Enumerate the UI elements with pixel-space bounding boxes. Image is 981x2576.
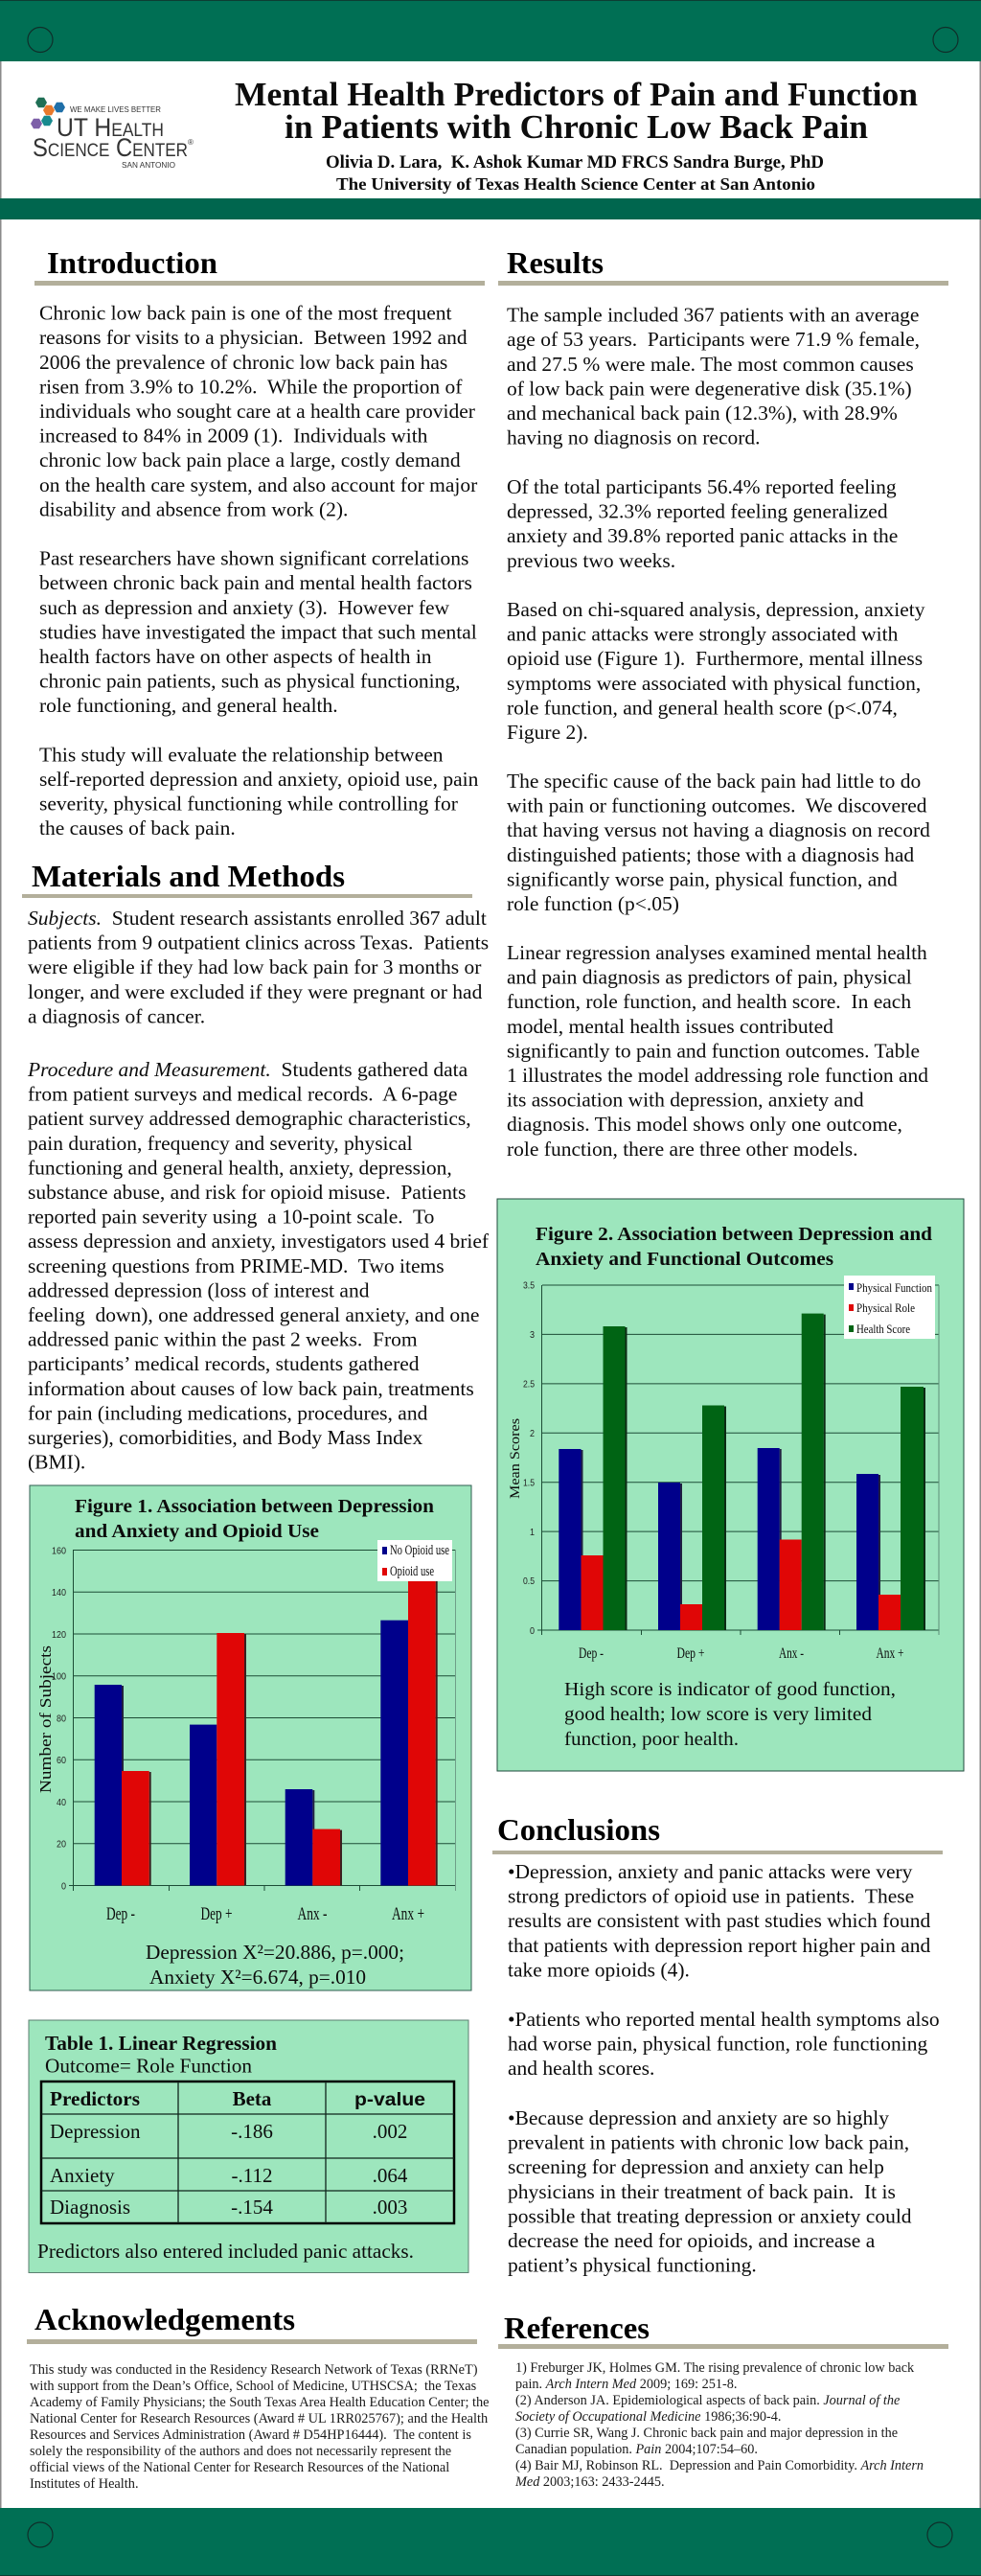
text block: materials and methods: feeling down), one addressed general anxiety, and one (28, 1303, 479, 1326)
text block: introduction: self-reported depression and anxiety, opioid use, pain (39, 768, 479, 791)
text block: results: Figure 2). (507, 721, 588, 744)
text block: references: Arch Intern Med 2009; 169: 251-8. (546, 2377, 737, 2392)
text block: results: significantly worse pain, physical function, and (507, 867, 898, 890)
logo: UT Health Science Center: Science Center (33, 133, 188, 162)
text block: introduction: 2006 the prevalence of chronic low back pain has (39, 351, 447, 374)
y axis ticks: 3 (530, 1329, 535, 1341)
authors and institution (326, 153, 824, 194)
figure 2 title: Figure 2. Association between Depression and (536, 1224, 932, 1245)
regression table: -.112 (232, 2164, 272, 2187)
regression table (41, 2082, 454, 2223)
text block: references: 2003;163: 2433-2445. (539, 2474, 665, 2490)
text block: results: Of the total participants 56.4% reported feeling (507, 475, 897, 498)
text block: results: Based on chi-squared analysis, depression, anxiety (507, 598, 925, 621)
bar chart: functional outcomes (508, 1276, 939, 1662)
text block: conclusions: that patients with depression report higher pain and (508, 1934, 930, 1957)
text block: conclusions: prevalent in patients with chronic low back pain, (508, 2131, 909, 2154)
text block: references: Society of Occupational Medicine (515, 2409, 701, 2425)
text block: materials and methods: reported pain severity using a 10-point scale. To (28, 1206, 434, 1229)
text block: introduction: reasons for visits to a physician. Between 1992 and (39, 326, 468, 349)
text block: materials and methods: addressed panic within the past 2 weeks. From (28, 1328, 418, 1351)
x axis labels: Anx - (779, 1645, 804, 1662)
x axis labels: Anx + (392, 1904, 424, 1924)
y axis ticks (52, 1545, 66, 1892)
y axis ticks: 2 (530, 1428, 535, 1439)
regression table: Depression (50, 2120, 141, 2143)
y axis ticks: 140 (52, 1587, 66, 1598)
y axis ticks: 80 (57, 1714, 66, 1725)
panel: table 1 (29, 2020, 468, 2273)
chi-squared note: Depression X²=20.886, p=.000; (146, 1941, 404, 1964)
text block: acknowledgements: solely the responsibility of the authors and does not necessarily represent the (30, 2444, 451, 2459)
text block: results: symptoms were associated with physical function, (507, 672, 921, 695)
x axis labels: Dep - (579, 1645, 604, 1662)
text block: materials and methods: surgeries), comorbidities, and Body Mass Index (28, 1426, 422, 1449)
heading: Acknowledgements (27, 2302, 477, 2344)
legend (844, 1276, 935, 1339)
text block: conclusions: patient’s physical functioning. (508, 2254, 757, 2277)
legend: Opioid use (390, 1564, 434, 1579)
x axis labels (579, 1645, 904, 1662)
text block: introduction: health factors have on other aspects of health in (39, 645, 432, 668)
text block: results: model, mental health issues contributed (507, 1015, 833, 1038)
text block: acknowledgements: This study was conducted in the Residency Research Network of Texas (RRNeT) (30, 2362, 478, 2378)
text block: introduction: severity, physical functioning while controlling for (39, 793, 458, 816)
figure 1 title: Figure 1. Association between Depression (75, 1496, 434, 1517)
bars (95, 1572, 438, 1886)
y axis ticks (523, 1280, 535, 1637)
regression table: .003 (373, 2196, 407, 2219)
text block: materials and methods: patient survey addressed demographic characteristics, (28, 1107, 471, 1130)
table title: Table 1. Linear Regression (45, 2032, 277, 2055)
text block: introduction: increased to 84% in 2009 (1). Individuals with (39, 425, 428, 448)
figure 1 title (75, 1496, 434, 1542)
text block: results: and pain diagnosis as predictors of pain, physical (507, 966, 912, 989)
regression table: p-value (354, 2090, 425, 2110)
x axis labels: Dep - (106, 1904, 135, 1924)
text block: materials and methods: substance abuse, and risk for opioid misuse. Patients (28, 1181, 466, 1204)
text block: acknowledgements: with support from the Dean’s Office, School of Medicine, UTHSCSA; the Texas (30, 2379, 477, 2394)
regression table: Anxiety (50, 2164, 115, 2187)
text block: introduction: such as depression and anxiety (3). However few (39, 596, 450, 619)
text block: results: and 27.5 % were male. The most common causes (507, 353, 914, 376)
text block: conclusions: decrease the need for opioids, and increase a (508, 2229, 876, 2252)
y axis ticks: 40 (57, 1797, 66, 1808)
title (235, 76, 918, 146)
text block: conclusions: screening for depression and anxiety can help (508, 2155, 884, 2178)
figure 2 note: High score is indicator of good function, (564, 1679, 896, 1700)
figure 2 title: Anxiety and Functional Outcomes (536, 1249, 833, 1270)
text block: results: with pain or functioning outcomes. We discovered (507, 794, 927, 817)
figure 2 note: good health; low score is very limited (564, 1704, 872, 1725)
text block: acknowledgements: Resources and Services Administration (Award # D54HP16444). The content is (30, 2427, 471, 2443)
text block: materials and methods: (BMI). (28, 1451, 85, 1474)
text block: introduction: role functioning, and general health. (39, 694, 338, 717)
text block: references: Med (514, 2474, 540, 2490)
text block: results: of low back pain were degenerative disk (35.1%) (507, 377, 912, 400)
text block: references: pain. (515, 2377, 546, 2392)
text block: results: Linear regression analyses examined mental health (507, 941, 927, 964)
text block: materials and methods: Students gathered data (271, 1058, 468, 1081)
logo: UT Health Science Center: UT Health (57, 113, 164, 142)
legend: Physical Function (856, 1280, 932, 1295)
heading: Conclusions (492, 1812, 943, 1854)
text block: acknowledgements: official views of the National Center for Research Resources of the National (30, 2460, 449, 2475)
regression table: Diagnosis (50, 2196, 130, 2219)
text block: references: Canadian population. (515, 2442, 635, 2457)
text block: materials and methods: participants’ medical records, students gathered (28, 1352, 420, 1375)
text block: results: role function, there are three other models. (507, 1138, 858, 1161)
table title: Outcome= Role Function (45, 2055, 252, 2078)
heading: Introduction: Introduction (47, 245, 217, 280)
text block: materials and methods: addressed depression (loss of interest and (28, 1278, 370, 1301)
text block: references: (2) Anderson JA. Epidemiological aspects of back pain. (515, 2393, 823, 2408)
text block: results: function, role function, and health score. In each (507, 990, 911, 1013)
text block: materials and methods: a diagnosis of cancer. (28, 1004, 205, 1027)
logo: UT Health Science Center: WE MAKE LIVES BETTER (70, 104, 161, 114)
lower header band (0, 198, 981, 219)
text block: references: Pain 2004;107:54–60. (635, 2442, 758, 2457)
y axis ticks: 2.5 (523, 1378, 535, 1390)
panel: figure 1 (30, 1485, 471, 1990)
x axis labels (106, 1904, 424, 1924)
y axis ticks: 3.5 (523, 1280, 535, 1292)
text block: materials and methods: functioning and general health, anxiety, depression, (28, 1156, 452, 1179)
text block: acknowledgements: Institutes of Health. (30, 2476, 139, 2492)
text block: results: 1 illustrates the model addressing role function and (507, 1064, 928, 1087)
figure 2 note (564, 1679, 896, 1750)
y axis ticks: 1 (530, 1527, 535, 1538)
authors and institution: Olivia D. Lara, K. Ashok Kumar MD FRCS Sandra Burge, PhD (326, 153, 824, 172)
legend: No Opioid use (390, 1543, 449, 1558)
text block: acknowledgements: National Center for Research Resources (Award # UL 1RR025767); and the Health (30, 2411, 488, 2426)
text block: conclusions: physicians in their treatment of back pain. It is (508, 2180, 896, 2203)
authors and institution: The University of Texas Health Science Center at San Antonio (336, 174, 815, 194)
text block: results: depressed, 32.3% reported feeling generalized (507, 500, 888, 523)
heading: Materials and Methods: Materials and Methods (32, 859, 345, 893)
text block: conclusions: had worse pain, physical function, role functioning (508, 2033, 928, 2056)
heading: References: References (504, 2311, 650, 2345)
text block: results: The specific cause of the back pain had little to do (507, 770, 921, 793)
text block: materials and methods: from patient surveys and medical records. A 6-page (28, 1083, 457, 1106)
text block: references: Arch Intern (859, 2458, 924, 2473)
y axis ticks: 20 (57, 1839, 66, 1851)
bars (559, 1314, 925, 1630)
table note: Predictors also entered included panic attacks. (37, 2240, 414, 2263)
text block: conclusions: possible that treating depression or anxiety could (508, 2204, 912, 2227)
y axis ticks: 0 (530, 1625, 535, 1637)
y axis ticks: 60 (57, 1755, 66, 1766)
regression table: -.186 (231, 2120, 273, 2143)
text block: results: diagnosis. This model shows only one outcome, (507, 1113, 902, 1136)
top green band (0, 0, 981, 61)
x axis labels: Dep + (201, 1904, 232, 1924)
text block: conclusions: •Because depression and anxiety are so highly (508, 2106, 889, 2129)
text block: results: previous two weeks. (507, 549, 675, 572)
text block: results: role function, and general health score (p<.074, (507, 696, 898, 719)
text block: conclusions: results are consistent with past studies which found (508, 1909, 931, 1932)
chi-squared note (146, 1941, 404, 1989)
text block: materials and methods: pain duration, frequency and severity, physical (28, 1132, 413, 1155)
text block: results: distinguished patients; those with a diagnosis had (507, 843, 914, 866)
text block: results: that having versus not having a diagnosis on record (507, 818, 930, 841)
bottom green band (0, 2508, 981, 2576)
text block: materials and methods: for pain (including medications, procedures, and (28, 1401, 428, 1424)
text block: materials and methods: Subjects. (28, 907, 102, 930)
text block: introduction: Chronic low back pain is one of the most frequent (39, 302, 452, 325)
heading: References (498, 2311, 948, 2349)
text block: conclusions: •Patients who reported mental health symptoms also (508, 2008, 940, 2031)
text block: results: role function (p<.05) (507, 892, 679, 915)
text block: materials and methods: longer, and were excluded if they were pregnant or had (28, 980, 483, 1003)
text block: conclusions: take more opioids (4). (508, 1958, 690, 1981)
text block: conclusions: strong predictors of opioid use in patients. These (508, 1885, 914, 1908)
heading: Conclusions: Conclusions (497, 1812, 660, 1847)
text block: introduction: individuals who sought care at a health care provider (39, 400, 475, 423)
figure 2 title (536, 1224, 932, 1270)
y axis ticks: 160 (52, 1545, 66, 1556)
text block: materials and methods: were eligible if they had low back pain for 3 months or (28, 955, 481, 978)
regression table: -.154 (231, 2196, 273, 2219)
text block: results: anxiety and 39.8% reported panic attacks in the (507, 524, 898, 547)
text block: introduction: This study will evaluate the relationship between (39, 743, 444, 766)
chi-squared note: Anxiety X²=6.674, p=.010 (149, 1966, 366, 1989)
y axis ticks: 1.5 (523, 1478, 535, 1489)
x axis labels: Anx - (297, 1904, 328, 1924)
y axis ticks: 100 (52, 1671, 66, 1683)
text block: materials and methods: Procedure and Measurement. (27, 1058, 271, 1081)
y axis ticks: 120 (52, 1629, 66, 1641)
figure 2 note: function, poor health. (564, 1729, 739, 1750)
text block: introduction: between chronic back pain and mental health factors (39, 571, 472, 594)
text block: introduction: on the health care system, and also account for major (39, 473, 477, 496)
table title (45, 2032, 277, 2078)
text block: results: opioid use (Figure 1). Furthermore, mental illness (507, 647, 923, 670)
text block: introduction: studies have investigated the impact that such mental (39, 620, 477, 643)
figure 1 title: and Anxiety and Opioid Use (75, 1521, 319, 1542)
bar chart: opioid use by depression and anxiety (36, 1540, 456, 1924)
text block: results: The sample included 367 patients with an average (507, 304, 919, 327)
heading: Results (498, 245, 948, 286)
y axis ticks: 0 (61, 1880, 66, 1892)
logo: UT Health Science Center (31, 98, 194, 170)
y axis label: Mean Scores (508, 1418, 523, 1499)
title: Mental Health Predictors of Pain and Function (235, 76, 918, 113)
text block: introduction: risen from 3.9% to 10.2%. While the proportion of (39, 375, 463, 398)
x axis labels: Anx + (876, 1645, 904, 1662)
heading: Results: Results (507, 245, 604, 280)
regression table: Predictors (50, 2087, 140, 2110)
text block: introduction: Past researchers have shown significant correlations (39, 547, 468, 570)
text block: results: and mechanical back pain (12.3%), with 28.9% (507, 402, 898, 425)
text block: references: 1) Freburger JK, Holmes GM. The rising prevalence of chronic low back (515, 2360, 915, 2376)
legend (377, 1540, 452, 1581)
heading: Acknowledgements: Acknowledgements (34, 2302, 295, 2336)
text block: materials and methods: Student research assistants enrolled 367 adult (102, 907, 487, 930)
text block: results: having no diagnosis on record. (507, 426, 761, 449)
title: in Patients with Chronic Low Back Pain (285, 108, 868, 146)
y axis ticks: 0.5 (523, 1576, 535, 1587)
text block: acknowledgements: Academy of Family Physicians; the South Texas Area Health Education Center; the (30, 2395, 490, 2410)
logo: UT Health Science Center: SAN ANTONIO (122, 161, 175, 170)
text block: conclusions: •Depression, anxiety and panic attacks were very (508, 1860, 913, 1883)
text block: introduction: chronic pain patients, such as physical functioning, (39, 670, 460, 693)
text block: results: its association with depression, anxiety and (507, 1089, 864, 1112)
regression table: .002 (373, 2120, 407, 2143)
text block: results: and panic attacks were strongly associated with (507, 623, 899, 646)
heading: Introduction (34, 245, 485, 286)
text block: materials and methods: patients from 9 outpatient clinics across Texas. Patients (28, 932, 489, 954)
text block: references: Journal of the (823, 2393, 900, 2408)
heading: Materials and Methods (22, 859, 472, 898)
legend: Health Score (856, 1322, 910, 1336)
text block: results: significantly to pain and function outcomes. Table (507, 1039, 920, 1062)
logo: UT Health Science Center: ® (188, 138, 194, 147)
panel: figure 2 (497, 1199, 964, 1771)
text block: results: age of 53 years. Participants were 71.9 % female, (507, 328, 920, 351)
text block: introduction: disability and absence from work (2). (39, 497, 348, 520)
text block: conclusions: and health scores. (508, 2057, 654, 2080)
text block: references: (4) Bair MJ, Robinson RL. Depression and Pain Comorbidity. (515, 2458, 860, 2473)
text block: references: (3) Currie SR, Wang J. Chronic back pain and major depression in the (515, 2426, 898, 2441)
text block: materials and methods: information about causes of low back pain, treatments (28, 1377, 474, 1400)
y axis label: Number of Subjects (36, 1645, 55, 1793)
regression table: Beta (233, 2087, 272, 2110)
regression table: .064 (373, 2164, 408, 2187)
text block: introduction: the causes of back pain. (39, 816, 236, 840)
text block: materials and methods: screening questions from PRIME-MD. Two items (28, 1254, 445, 1277)
text block: introduction: chronic low back pain place a large, costly demand (39, 448, 461, 472)
legend: Physical Role (856, 1300, 915, 1315)
text block: materials and methods: assess depression and anxiety, investigators used 4 brief (28, 1230, 490, 1253)
text block: references: 1986;36:90-4. (701, 2409, 781, 2425)
x axis labels: Dep + (676, 1645, 705, 1662)
